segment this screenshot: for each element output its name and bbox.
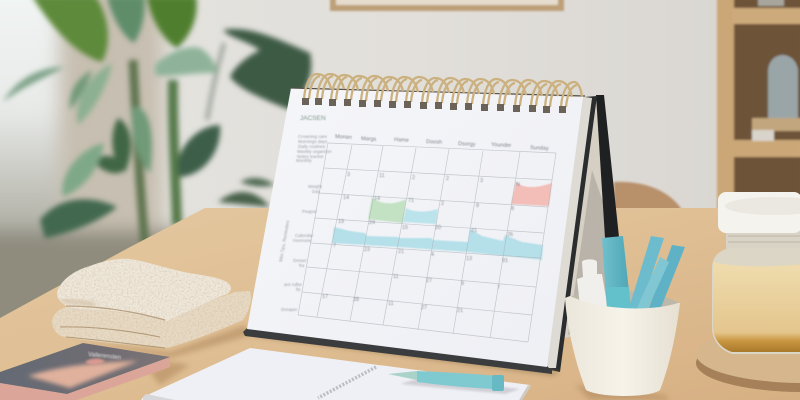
- calendar day numbers: 8: [511, 206, 514, 212]
- highlighted period band: [332, 227, 543, 260]
- weekday headers: Hame: [394, 137, 409, 144]
- wood coaster: [696, 325, 800, 392]
- chair back: [614, 182, 687, 220]
- weekday headers: Doosh: [426, 139, 442, 146]
- calendar day numbers: 3: [347, 172, 350, 178]
- calendar day numbers: 7: [333, 243, 336, 249]
- calendar shadow on table: [245, 336, 560, 376]
- calendar day numbers: 71: [408, 198, 414, 204]
- calendar title and side notes: Peapot: [302, 209, 317, 214]
- calendar day numbers: 27: [421, 305, 427, 311]
- calendar day numbers: 2: [412, 175, 415, 181]
- calendar day numbers: 27: [426, 278, 432, 284]
- calendar day numbers: 11: [388, 301, 394, 307]
- calendar back cover edge: [243, 328, 552, 374]
- magazine: [0, 343, 170, 400]
- calendar day numbers: N: [516, 182, 520, 188]
- calendar title and side notes: Mini Tips, Reminders: [278, 219, 290, 262]
- calendar title and side notes: fis: [296, 287, 301, 292]
- calendar day numbers: 11: [393, 274, 399, 280]
- calendar day numbers: 14: [343, 195, 349, 201]
- calendar day numbers: 23: [364, 247, 370, 253]
- calendar page: [247, 88, 592, 368]
- calendar title and side notes: JACSEN: [300, 115, 326, 122]
- highlighted day: green: [368, 197, 406, 223]
- calendar day numbers: 9: [461, 281, 464, 287]
- calendar title and side notes: Daily routines: [298, 144, 326, 149]
- calendar day numbers: 4: [431, 252, 434, 258]
- highlighted day: pink: [511, 182, 552, 206]
- calendar day numbers: 21: [457, 308, 463, 314]
- calendar title and side notes: Crowning care: [298, 134, 328, 139]
- pen: [388, 371, 520, 394]
- calendar day numbers: 2: [446, 176, 449, 182]
- calendar title and side notes: [278, 115, 332, 312]
- honey jar: [712, 192, 800, 354]
- binding holes: [302, 98, 566, 113]
- calendar day numbers: 11: [379, 173, 385, 179]
- notebook spiral: [318, 367, 376, 398]
- potted plant: [3, 0, 311, 245]
- calendar title and side notes: Hormone: [293, 238, 312, 243]
- calendar day numbers: 8: [476, 203, 479, 209]
- calendar day numbers: 19: [338, 219, 344, 225]
- calendar day numbers: 13: [466, 256, 472, 262]
- weekday headers: Sunday: [530, 145, 549, 152]
- calendar title and side notes: Weight: [308, 184, 323, 189]
- calendar title and side notes: Mornings days: [298, 139, 328, 144]
- calendar day numbers: [322, 172, 520, 314]
- calendar day numbers: 17: [322, 294, 328, 300]
- weekday headers: Younder: [491, 142, 512, 149]
- wooden table: [0, 208, 800, 400]
- calendar title and side notes: fra: [299, 263, 305, 268]
- calendar day numbers: 15: [402, 225, 408, 231]
- spiral binding rings: [291, 74, 585, 107]
- calendar stand back: [549, 95, 619, 372]
- weekday headers: Margs: [361, 136, 377, 143]
- calendar day numbers: 20: [435, 225, 441, 231]
- curtain: [0, 0, 210, 350]
- magazine: Vallerensten: [88, 352, 121, 361]
- calendar title and side notes: Weekly organizer: [297, 149, 332, 154]
- weekday headers: Monan: [335, 134, 352, 141]
- pen cup with pens: [565, 236, 685, 396]
- open notebook: [140, 348, 531, 400]
- calendar day numbers: 21: [398, 249, 404, 255]
- wall picture frame: [330, 0, 564, 11]
- table shadows: [70, 325, 670, 400]
- calendar day numbers: 14: [374, 196, 380, 202]
- calendar day numbers: 7: [497, 285, 500, 291]
- highlighted day: light blue: [403, 208, 438, 224]
- calendar day numbers: 24: [369, 220, 375, 226]
- wooden shelf unit: [717, 0, 800, 223]
- calendar title and side notes: Notes tracker: [297, 154, 324, 159]
- weekday headers: Dsorgy: [458, 141, 476, 148]
- calendar title and side notes: Day: [312, 189, 321, 194]
- calendar title and side notes: ant Adbe: [284, 282, 302, 287]
- calendar day numbers: 91: [502, 258, 508, 264]
- weekday headers: [335, 134, 549, 152]
- calendar title and side notes: Dreaper: [281, 307, 298, 312]
- calendar title and side notes: Dreser: [293, 258, 307, 263]
- calendar day numbers: 26: [507, 232, 513, 238]
- calendar day numbers: 28: [353, 297, 359, 303]
- calendar title and side notes: Calendar: [295, 233, 314, 238]
- folded towels: [52, 259, 251, 348]
- calendar title and side notes: Monthly: [296, 158, 313, 163]
- calendar day numbers: 21: [471, 228, 477, 234]
- calendar day numbers: 3: [480, 178, 483, 184]
- calendar day numbers: 2: [441, 201, 444, 207]
- calendar grid: [298, 143, 556, 342]
